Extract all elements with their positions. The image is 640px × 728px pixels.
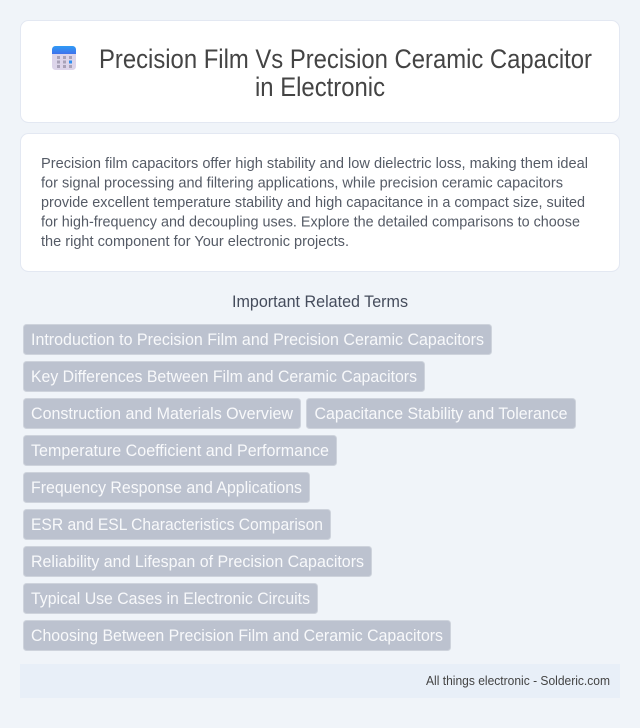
- tag: Capacitance Stability and Tolerance: [314, 404, 568, 423]
- panel: summary text: [20, 134, 620, 272]
- panel: summary text: for signal processing and filtering applications, while precision ceramic capacitors: [41, 174, 563, 192]
- title: Precision Film Vs Precision Ceramic Capacitor: [99, 44, 592, 74]
- footer: [20, 664, 620, 698]
- tag: ESR and ESL Characteristics Comparison: [31, 515, 323, 534]
- tag: Frequency Response and Applications: [31, 478, 302, 497]
- tag: [24, 510, 330, 540]
- tag: [24, 398, 300, 428]
- title: in Electronic: [255, 72, 385, 102]
- panel: summary text: for high-frequency and decoupling uses. Explore the detailed comparisons to choose: [41, 214, 580, 230]
- tag: [24, 436, 336, 466]
- icon: calendar: [52, 46, 76, 70]
- tag: [24, 472, 310, 502]
- tag: Temperature Coefficient and Performance: [31, 441, 329, 460]
- tag: [24, 546, 372, 576]
- tag: [24, 362, 424, 392]
- tag: [306, 398, 576, 428]
- heading: related terms: Important Related Terms: [232, 293, 408, 311]
- tag: Reliability and Lifespan of Precision Capacitors: [31, 552, 364, 571]
- tag: Choosing Between Precision Film and Ceramic Capacitors: [31, 626, 443, 645]
- title: [99, 44, 592, 102]
- tag: Key Differences Between Film and Ceramic Capacitors: [31, 367, 417, 386]
- panel: summary text: provide excellent temperature stability and high capacitance in a compact size, suited: [41, 194, 585, 211]
- tag: Typical Use Cases in Electronic Circuits: [31, 589, 310, 608]
- tag: [24, 620, 450, 650]
- tag: [24, 584, 318, 614]
- footer: All things electronic - Solderic.com: [426, 674, 610, 688]
- tag: Construction and Materials Overview: [31, 404, 294, 423]
- tag list: [24, 324, 576, 650]
- panel: summary text: the right component for Your electronic projects.: [41, 233, 349, 250]
- panel: summary text: Precision film capacitors offer high stability and low dielectric loss, making them ideal: [41, 155, 588, 172]
- tag: [24, 324, 492, 354]
- tag: Introduction to Precision Film and Precision Ceramic Capacitors: [31, 330, 484, 349]
- panel: title card: [20, 20, 620, 122]
